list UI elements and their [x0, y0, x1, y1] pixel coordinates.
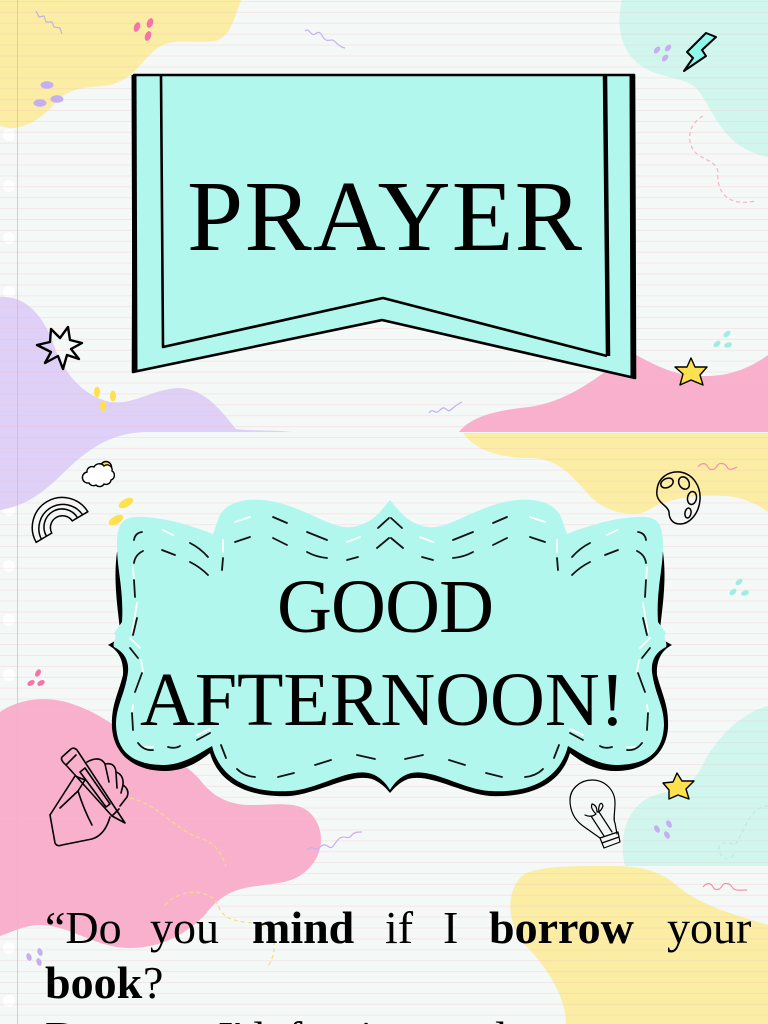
- blob: yellow top left: [0, 0, 241, 128]
- icon: palette skull: [657, 472, 700, 524]
- icon: light bulb: [570, 780, 620, 848]
- heading: GOOD: GOOD: [277, 565, 494, 649]
- text line 1: borrow: [489, 902, 634, 953]
- banner: PRAYER ribbon: [133, 75, 635, 378]
- text line 1: I: [443, 902, 458, 953]
- text line 2: ?: [143, 957, 163, 1008]
- body text: dialogue: [45, 902, 751, 1024]
- text line 1: mind: [252, 902, 355, 953]
- blob: yellow right: [463, 433, 768, 514]
- icon: cloud with sun: [82, 462, 114, 487]
- plaque: good afternoon sign: [108, 500, 672, 796]
- text line 1: your: [667, 902, 751, 953]
- blob: pink lower left: [0, 699, 321, 948]
- text line 2: book: [45, 957, 143, 1008]
- blob: teal top right: [619, 0, 768, 157]
- text line 1: if: [385, 902, 414, 953]
- text line 1: you: [150, 902, 219, 953]
- icon: yellow star top: [675, 358, 707, 385]
- blob: purple left: [0, 297, 293, 510]
- icon: hand holding pencil: [50, 748, 128, 846]
- heading: PRAYER: PRAYER: [187, 160, 583, 272]
- text line 1: “Do: [45, 902, 122, 953]
- heading: AFTERNOON!: AFTERNOON!: [140, 658, 625, 742]
- icon: yellow star bottom: [663, 773, 694, 799]
- blob: teal lower right: [623, 706, 768, 866]
- icon: rainbow: [32, 497, 88, 542]
- icon: lightning bolt: [684, 33, 716, 71]
- blob: pink right: [459, 352, 768, 432]
- icon: outlined star: [37, 327, 82, 369]
- blob: yellow lower right: [510, 866, 768, 1024]
